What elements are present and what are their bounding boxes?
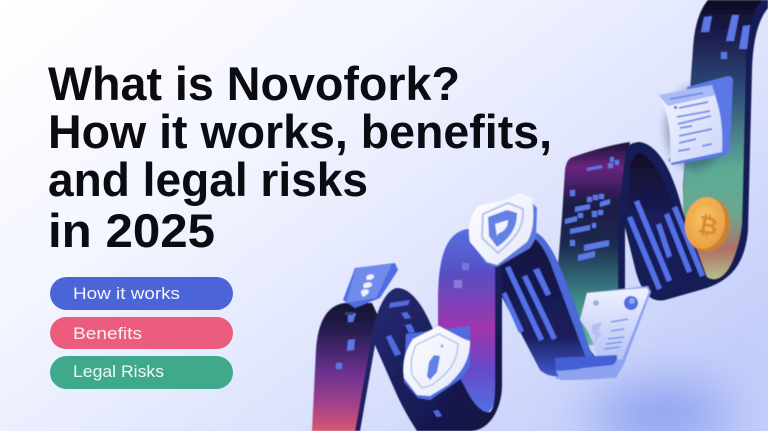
ribbon segment: far right face, arch and U-curve <box>618 0 768 300</box>
icon: small square badge <box>343 263 398 308</box>
pill: Benefits: Benefits <box>73 325 142 343</box>
icon: upper shield <box>469 193 537 267</box>
title: What is Novofork? <box>48 57 460 110</box>
pill: Legal Risks <box>50 356 233 389</box>
icon: lower shield <box>403 326 470 400</box>
ribbon illustration <box>312 0 768 431</box>
ribbon segment: dark band with bars <box>498 232 618 380</box>
ribbon segment: left gradient face <box>312 303 380 431</box>
ribbon segment: central face with code <box>558 142 630 345</box>
title <box>48 57 552 257</box>
title: How it works, benefits, <box>48 105 552 158</box>
ribbon segment: purple face with stripes <box>438 228 501 417</box>
ribbon segment: navy arch <box>355 262 502 431</box>
small card at fold <box>555 286 651 379</box>
coin <box>681 194 734 255</box>
pill: How it works: How it works <box>73 285 180 303</box>
pill: Legal Risks: Legal Risks <box>73 363 164 381</box>
title: in 2025 <box>48 204 215 257</box>
title: and legal risks <box>48 153 368 206</box>
pill: Benefits <box>50 317 233 349</box>
document card <box>658 76 733 170</box>
pill: How it works <box>50 277 233 310</box>
coin: ₿ <box>696 211 720 241</box>
